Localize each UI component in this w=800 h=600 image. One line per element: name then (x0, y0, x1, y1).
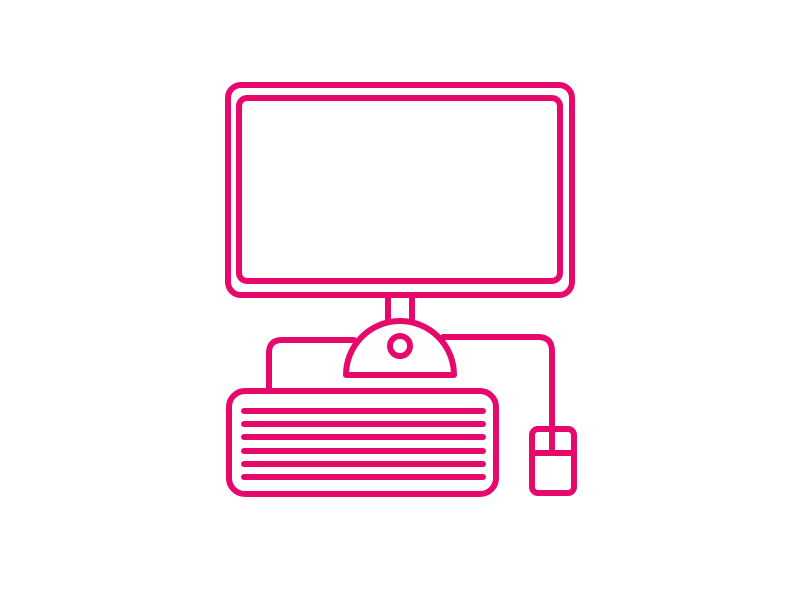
cable to mouse (443, 337, 552, 429)
mouse (532, 429, 574, 493)
stand base (346, 321, 454, 375)
monitor stand neck (388, 298, 412, 320)
keyboard (229, 391, 496, 494)
monitor (228, 85, 572, 295)
cable to keyboard (269, 340, 354, 389)
